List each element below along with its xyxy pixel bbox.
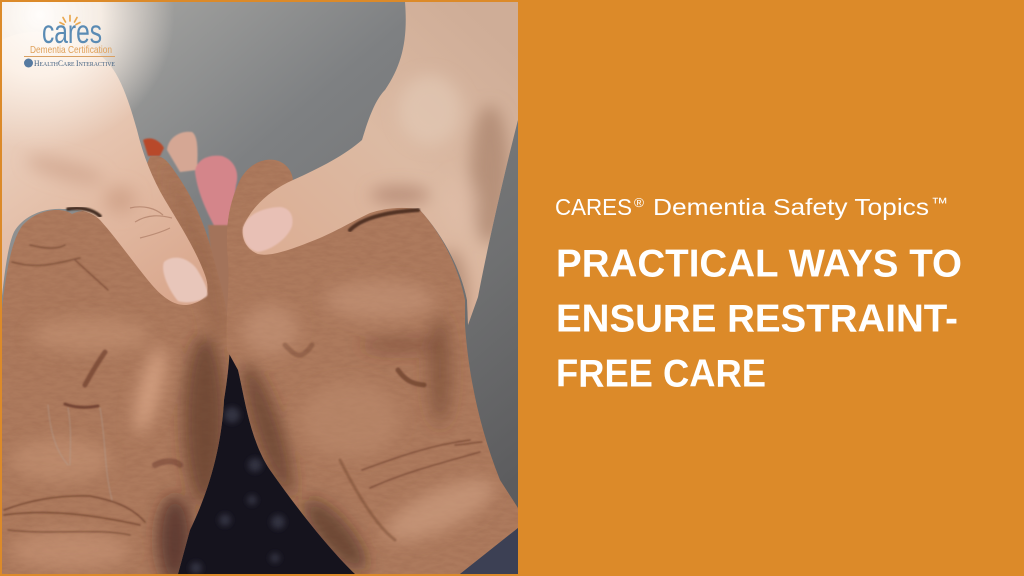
icon: HealthCare Interactive globe [24, 58, 33, 68]
logo: CARES Dementia Certification [24, 13, 115, 68]
fingertips between the hands [142, 131, 238, 316]
left elderly hand [0, 150, 240, 576]
right elderly hand [220, 150, 520, 576]
photo: elderly hands held by younger hands [0, 0, 520, 576]
heading: practical ways to ensure restraint-free care [556, 242, 962, 396]
right young hand [242, 2, 518, 325]
logo company name: HEALTHCARE INTERACTIVE [34, 58, 115, 68]
right thumb nail [243, 207, 292, 252]
left young hand [2, 50, 208, 305]
heading: practical ways to ensure restraint-free care: ENSURE RESTRAINT- [556, 298, 958, 340]
logo subtitle: Dementia Certification [30, 44, 112, 56]
cuff [460, 528, 518, 574]
heading: practical ways to ensure restraint-free care: PRACTICAL WAYS TO [556, 242, 962, 286]
right finger gap shadow [350, 210, 418, 230]
left hand web shadow [68, 208, 100, 216]
logo divider [24, 56, 115, 57]
left thumb nail [163, 258, 207, 302]
subtitle: CARES Dementia Safety Topics [555, 194, 948, 220]
subtitle: CARES Dementia Safety Topics: Dementia Safety Topics [653, 194, 929, 220]
logo wordmark: cares [42, 13, 102, 50]
subtitle: CARES Dementia Safety Topics: CARES [555, 194, 632, 220]
subtitle: CARES Dementia Safety Topics: ® [634, 195, 644, 210]
subtitle: CARES Dementia Safety Topics: ™ [931, 195, 948, 212]
icon: sunburst [60, 16, 80, 24]
heading: practical ways to ensure restraint-free care: FREE CARE [556, 352, 766, 396]
top-left glow behind logo [2, 2, 168, 136]
